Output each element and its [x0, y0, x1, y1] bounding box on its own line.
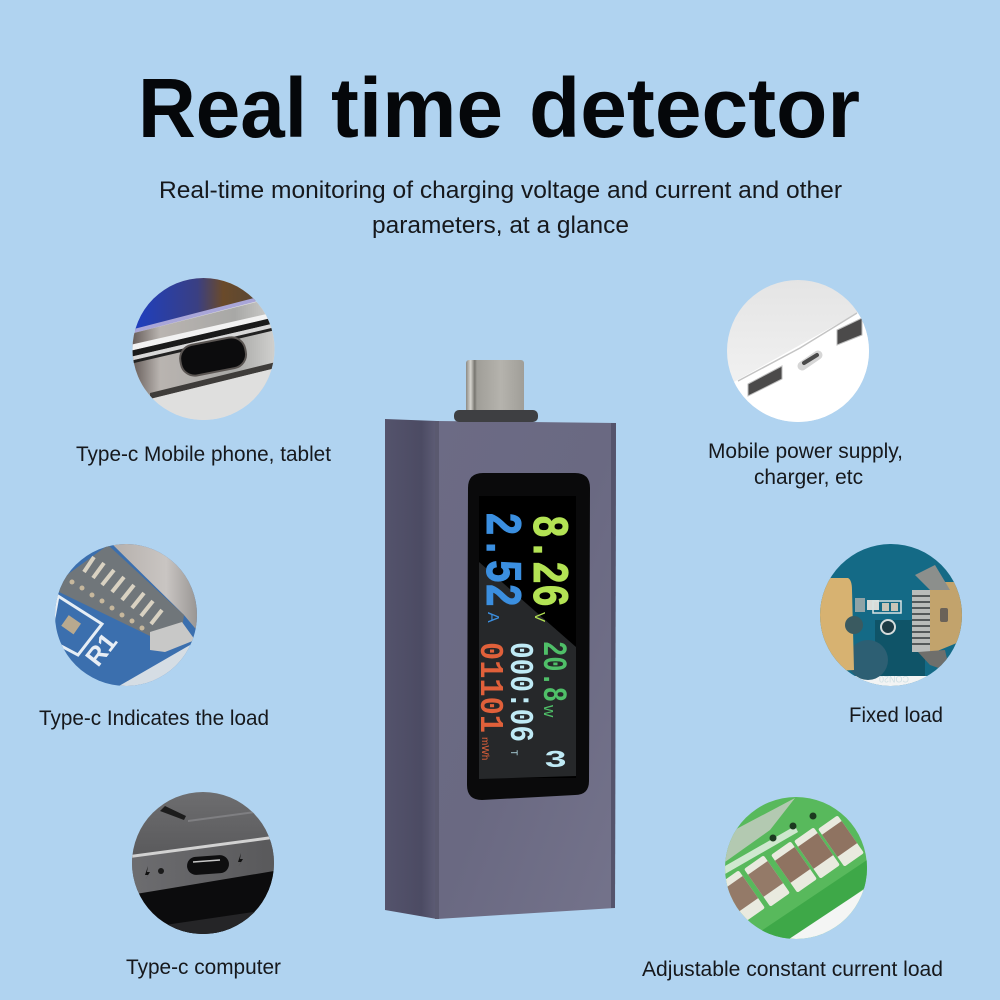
device: USB tester	[385, 360, 616, 919]
reading: time: 000:06	[501, 642, 538, 742]
subtitle	[159, 177, 842, 239]
icon: constant current load board photo	[725, 797, 867, 939]
reading: energy: 01101	[471, 642, 508, 733]
icon: computer port photo	[132, 792, 274, 934]
icon: power bank ports photo	[727, 280, 869, 422]
reading: power: w	[540, 704, 559, 718]
reading: voltage: V	[531, 612, 548, 622]
icon: fixed load board photo: CON20	[879, 674, 909, 684]
title: Real	[138, 61, 307, 155]
label: load: Type-c Indicates the load	[39, 707, 269, 730]
label: phone: Type-c Mobile phone, tablet	[76, 443, 331, 466]
label: fixed load: Fixed load	[849, 704, 943, 727]
type-c plug	[454, 360, 538, 422]
reading: mode number: 3	[544, 748, 567, 775]
reading: current: 2.52	[471, 512, 528, 607]
label: adjustable load: Adjustable constant current load	[642, 958, 943, 981]
title	[138, 61, 860, 155]
reading: power: 20.8	[533, 641, 571, 702]
metal body	[385, 419, 616, 919]
title: time	[331, 61, 503, 155]
label: power supply	[708, 440, 903, 489]
icon: load connector board photo: R1	[79, 627, 123, 672]
title: detector	[529, 61, 860, 155]
label: computer: Type-c computer	[126, 956, 281, 979]
screen	[467, 473, 590, 800]
subtitle: parameters, at a glance	[372, 212, 629, 239]
label: power supply: Mobile power supply,	[708, 440, 903, 463]
label: power supply: charger, etc	[754, 466, 863, 489]
reading: current: A	[484, 612, 501, 623]
subtitle: Real-time monitoring of charging voltage and current and other	[159, 177, 842, 204]
icon: phone type-c port photo	[132, 278, 274, 420]
reading: voltage: 8.26	[518, 515, 575, 607]
reading: time: T	[509, 750, 519, 756]
icon: load connector board photo	[55, 544, 197, 686]
reading: energy: mWh	[479, 737, 490, 760]
icon: fixed load board photo	[818, 542, 964, 690]
